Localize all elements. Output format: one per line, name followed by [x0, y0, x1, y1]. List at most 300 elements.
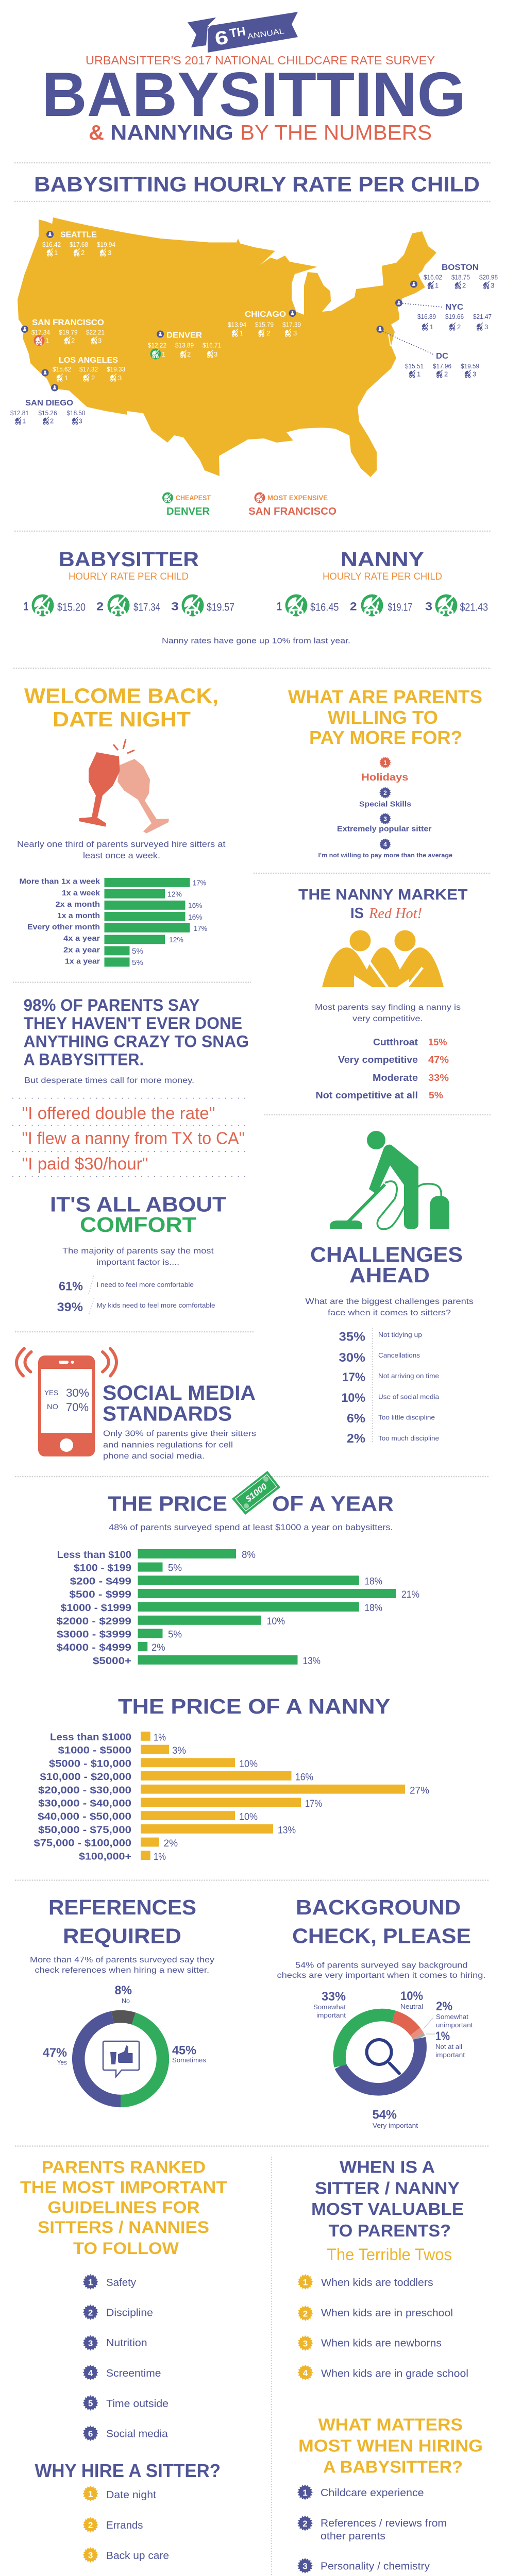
panel: social media standards: Only 30% of parents give their sitters	[103, 1430, 256, 1438]
city: Seattle: 1	[54, 249, 58, 257]
bar chart: frequency: 1x a month	[57, 911, 100, 920]
panel: what parents pay more for: 3	[383, 815, 387, 822]
city: Los Angeles: 2	[91, 374, 95, 382]
panel: background check: Neutral	[400, 2003, 423, 2010]
city: Los Angeles: $19.33	[107, 365, 125, 373]
city: San Diego: SAN DIEGO	[25, 399, 73, 408]
panel: references required: No	[122, 1997, 130, 2005]
panel: why hire a sitter: Back up care	[106, 2550, 169, 2562]
panel: nanny rates: 1	[277, 600, 282, 613]
panel: background check: important	[316, 2011, 346, 2019]
panel: when is a sitter most valuable: When kids are in preschool	[321, 2308, 453, 2319]
challenge list	[339, 1330, 440, 1446]
city: San Diego: $15.26	[38, 409, 57, 417]
bar chart: frequency: 17%	[193, 879, 206, 887]
bar chart: yearly babysitting spend: $4000 - $4999	[56, 1642, 131, 1653]
panel: nanny rates: $16.45	[310, 602, 339, 613]
city: Boston: BOSTON	[442, 263, 479, 272]
panel: why hire a sitter: 3	[88, 2550, 93, 2561]
city: NYC: $19.66	[445, 313, 464, 320]
panel: background check: 2%	[436, 1999, 452, 2013]
city: San Francisco: 3	[98, 337, 102, 344]
city: Denver: 3	[214, 350, 217, 358]
competitiveness table: Not competitive at all	[315, 1090, 418, 1100]
panel: 98% of parents: A BABYSITTER.	[24, 1050, 144, 1069]
city: San Francisco: $19.79	[59, 329, 77, 336]
panel: challenges ahead: face when it comes to sitters?	[328, 1309, 451, 1317]
panel: challenges ahead	[305, 1131, 474, 1446]
city: NYC: 1	[430, 323, 433, 331]
city: Los Angeles: 1	[64, 374, 68, 382]
bar chart: frequency: More than 1x a week	[20, 877, 100, 886]
bar chart: yearly babysitting spend: 10%	[267, 1616, 285, 1627]
panel: nanny rates	[277, 548, 488, 616]
bar chart: frequency	[20, 877, 207, 967]
city: Seattle: $17.68	[70, 241, 88, 248]
bar chart: yearly nanny spend: $75,000 - $100,000	[34, 1838, 131, 1849]
donut chart: background checks	[340, 2015, 420, 2089]
panel: background check: 33%	[322, 1990, 346, 2004]
bar chart: yearly nanny spend: $100,000+	[79, 1851, 131, 1862]
legend: cheapest and most expensive: DENVER	[166, 506, 210, 517]
panel: welcome back, date night	[17, 684, 226, 967]
bar chart: frequency: 1x a year	[65, 957, 100, 965]
panel: references required: REFERENCES	[48, 1895, 196, 1919]
panel: what matters most when hiring: References / reviews from	[321, 2518, 447, 2529]
city: Chicago: $15.79	[255, 321, 274, 329]
ribbon: 6th annual: TH	[229, 24, 247, 41]
panel: welcome back, date night: DATE NIGHT	[53, 707, 191, 731]
competitiveness table: Cutthroat	[373, 1037, 418, 1047]
panel: what matters most when hiring: A BABYSITTER?	[323, 2458, 463, 2476]
panel: parents ranked guidelines: SITTERS / NANNIES	[38, 2218, 209, 2236]
city: Chicago: $17.39	[282, 321, 301, 329]
panel: parents ranked guidelines: THE MOST IMPORTANT	[20, 2178, 228, 2197]
panel: why hire a sitter: WHY HIRE A SITTER?	[35, 2460, 221, 2481]
bar chart: yearly babysitting spend: 5%	[168, 1563, 182, 1574]
bar chart: yearly nanny spend: Less than $1000	[50, 1732, 131, 1743]
challenge list: 6%	[347, 1412, 365, 1426]
bar chart: yearly babysitting spend: 8%	[242, 1550, 256, 1561]
city: Los Angeles: LOS ANGELES	[59, 356, 118, 365]
city: Boston: 2	[462, 281, 466, 290]
panel: when is a sitter most valuable: SITTER / NANNY	[315, 2178, 460, 2198]
icon: wine glasses	[79, 739, 169, 834]
panel: what parents pay more for: WILLING TO	[328, 707, 438, 728]
city: DC	[376, 326, 479, 378]
bar chart: frequency: 12%	[169, 936, 183, 944]
panel: what parents pay more for: WHAT ARE PARENTS	[288, 686, 482, 707]
panel: what parents pay more for: 2	[383, 789, 387, 796]
panel: social media standards: and nannies regulations for cell	[103, 1440, 233, 1450]
bar chart: yearly babysitting spend: 5%	[168, 1629, 182, 1640]
city: San Francisco: SAN FRANCISCO	[32, 318, 104, 327]
city: San Francisco	[21, 318, 105, 346]
panel: comfort: 39%	[57, 1300, 83, 1314]
panel: references required	[30, 1895, 214, 2101]
challenge list: 35%	[339, 1330, 365, 1344]
panel: 98% of parents	[13, 996, 251, 1177]
panel: comfort: The majority of parents say the most	[62, 1247, 214, 1256]
competitiveness table: 33%	[428, 1073, 449, 1083]
icon: $1000 bill	[232, 1471, 280, 1515]
panel: references required: REQUIRED	[63, 1924, 181, 1947]
city: Chicago: 1	[240, 329, 243, 337]
header	[42, 12, 466, 144]
city: Seattle: SEATTLE	[60, 231, 97, 239]
city: Los Angeles: 3	[118, 374, 122, 382]
city: Boston: 1	[435, 281, 439, 290]
icon: $1000 bill: $1000	[243, 1481, 269, 1504]
panel: when is a sitter most valuable: 2	[303, 2309, 308, 2318]
map silhouette	[18, 217, 436, 477]
legend: cheapest and most expensive: MOST EXPENSIVE	[267, 494, 328, 502]
panel: what parents pay more for: Holidays	[361, 772, 409, 783]
panel: 98% of parents: But desperate times call for more money.	[24, 1076, 194, 1085]
panel: what parents pay more for: 4	[383, 841, 387, 848]
panel: what matters most when hiring	[297, 2415, 483, 2573]
bar chart: yearly nanny spend: 3%	[172, 1745, 186, 1756]
panel: nanny market: Red Hot!	[368, 905, 422, 922]
city: San Diego: $18.50	[67, 409, 86, 417]
bar chart: yearly babysitting spend: 18%	[365, 1603, 382, 1614]
bar chart: yearly nanny spend: $40,000 - $50,000	[38, 1811, 131, 1822]
icon: ringing phone: 30%	[66, 1386, 89, 1399]
city: Denver: 2	[187, 350, 191, 358]
bar chart: yearly nanny spend: 1%	[154, 1732, 166, 1743]
bar chart: yearly babysitting spend: Less than $100	[57, 1550, 131, 1561]
panel: when is a sitter most valuable: 1	[303, 2277, 308, 2287]
ranked list: 2	[88, 2308, 93, 2317]
panel: background check: CHECK, PLEASE	[292, 1924, 471, 1947]
panel: what matters most when hiring: Personality / chemistry	[321, 2561, 430, 2572]
panel: price of a year: 48% of parents surveyed spend at least $1000 a year on babysitters.	[109, 1522, 393, 1532]
panel: what parents pay more for: I'm not willing to pay more than the average	[318, 852, 452, 859]
icon: person vacuuming	[330, 1131, 449, 1229]
panel: what parents pay more for: Special Skills	[359, 800, 411, 808]
panel: why hire a sitter: Errands	[106, 2520, 143, 2531]
bar chart: yearly babysitting spend: $3000 - $3999	[57, 1629, 131, 1640]
bar chart: frequency: 4x a year	[63, 934, 100, 943]
ranked list: Screentime	[106, 2368, 161, 2379]
ranked list: 6	[88, 2429, 93, 2439]
city: DC: $15.51	[405, 362, 424, 370]
panel: background check: BACKGROUND	[296, 1895, 461, 1919]
panel: references required: check references when hiring a new sitter.	[35, 1966, 209, 1975]
challenge list: 10%	[341, 1391, 365, 1405]
city: San Francisco: $22.21	[86, 329, 105, 336]
ribbon: 6th annual	[188, 12, 298, 53]
panel: social media standards: STANDARDS	[103, 1403, 232, 1426]
panel: background check: 54%	[372, 2108, 397, 2122]
panel: nanny market	[298, 887, 468, 1100]
challenge list: 17%	[342, 1370, 365, 1384]
city: San Francisco: 2	[71, 337, 75, 344]
city: Boston: 3	[491, 281, 494, 290]
icon: ringing phone	[16, 1349, 116, 1456]
panel: nanny market: Most parents say finding a nanny is	[315, 1003, 461, 1012]
ranked list: 4	[88, 2368, 93, 2378]
panel: 98% of parents: 98% OF PARENTS SAY	[24, 996, 200, 1014]
city: Denver: 1	[162, 350, 165, 358]
ribbon: 6th annual: ANNUAL	[247, 27, 285, 41]
bar chart: yearly nanny spend: $50,000 - $75,000	[38, 1825, 131, 1836]
bar chart: yearly nanny spend: 13%	[278, 1825, 296, 1836]
panel: what matters most when hiring: 3	[302, 2562, 308, 2571]
nanny rates note: Nanny rates have gone up 10% from last year.	[162, 637, 350, 646]
bar chart: yearly nanny spend: $30,000 - $40,000	[38, 1798, 131, 1809]
panel: nanny rates: 3	[425, 600, 432, 613]
city: NYC: 2	[457, 323, 461, 331]
title second line: BY THE NUMBERS	[240, 121, 432, 144]
city: NYC: 3	[484, 323, 488, 331]
panel: why hire a sitter	[35, 2460, 221, 2563]
bar chart: frequency: 16%	[188, 902, 202, 910]
bar chart: frequency: 2x a year	[63, 945, 100, 954]
panel: nanny rates: $21.43	[460, 602, 488, 613]
title second line	[89, 121, 432, 144]
bar chart: yearly nanny spend: 10%	[239, 1759, 258, 1770]
ranked list: Social media	[106, 2429, 169, 2440]
bar chart: yearly nanny spend: 16%	[295, 1772, 313, 1783]
bar chart: frequency: 12%	[167, 890, 182, 899]
panel: background check: unimportant	[436, 2021, 473, 2029]
bar chart: yearly babysitting spend: $100 - $199	[74, 1563, 131, 1574]
panel: when is a sitter most valuable: When kids are newborns	[321, 2338, 442, 2349]
panel: what matters most when hiring: Childcare experience	[321, 2487, 424, 2499]
city: DC: DC	[436, 352, 448, 361]
panel: what parents pay more for: 1	[383, 759, 387, 767]
city: Seattle	[42, 231, 115, 257]
quotes	[13, 1104, 251, 1177]
city: Boston: $20.98	[479, 273, 498, 281]
panel: 98% of parents: ANYTHING CRAZY TO SNAG	[24, 1032, 249, 1050]
panel: references required: Yes	[57, 2059, 67, 2066]
city: Denver: $13.89	[175, 342, 194, 349]
panel: social media standards: phone and social media.	[103, 1452, 205, 1461]
legend: cheapest and most expensive: CHEAPEST	[176, 494, 211, 502]
panel: references required: Sometimes	[172, 2056, 206, 2064]
panel: social media standards	[16, 1349, 256, 1461]
bar chart: frequency: 16%	[188, 913, 202, 922]
bar chart: yearly nanny spend: $1000 - $5000	[58, 1745, 131, 1756]
panel: parents ranked guidelines: GUIDELINES FOR	[47, 2198, 200, 2217]
city: DC: 1	[417, 370, 420, 378]
city: Chicago: 3	[293, 329, 297, 337]
panel: parents ranked guidelines: TO FOLLOW	[73, 2239, 179, 2258]
panel: babysitter rates: $17.34	[133, 602, 160, 613]
city: San Francisco: $17.34	[31, 329, 50, 336]
bar chart: yearly babysitting spend: 13%	[303, 1656, 321, 1667]
city: Denver: $16.71	[203, 342, 221, 349]
heading: hourly rate: BABYSITTING HOURLY RATE PER CHILD	[34, 172, 480, 196]
competitiveness table: 5%	[429, 1090, 443, 1100]
competitiveness table: Moderate	[373, 1073, 418, 1083]
panel: references required: 47%	[43, 2046, 67, 2060]
bar chart: yearly nanny spend	[34, 1732, 429, 1862]
panel: background check: 54% of parents surveyed say background	[295, 1961, 468, 1970]
bar chart: yearly nanny spend: $20,000 - $30,000	[38, 1785, 131, 1796]
city: Boston: $16.02	[424, 273, 442, 281]
title second line: NANNYING	[110, 121, 233, 144]
panel: background check: 1%	[435, 2029, 450, 2043]
bar chart: yearly nanny spend: 17%	[305, 1799, 322, 1809]
city: San Diego: 2	[50, 417, 54, 425]
bar chart: yearly babysitting spend: $200 - $499	[70, 1576, 131, 1587]
panel: welcome back, date night: WELCOME BACK,	[24, 684, 218, 708]
city: NYC: NYC	[445, 303, 463, 312]
panel: what matters most when hiring: 1	[302, 2488, 308, 2498]
panel: when is a sitter most valuable: 4	[303, 2368, 308, 2378]
panel: social media standards: SOCIAL MEDIA	[103, 1382, 256, 1404]
ranked list: Discipline	[106, 2307, 153, 2318]
panel: when is a sitter most valuable: 3	[303, 2339, 308, 2348]
bar chart: yearly babysitting spend: $1000 - $1999	[61, 1603, 131, 1614]
city: NYC: $16.89	[417, 313, 436, 320]
city: Denver	[148, 331, 221, 360]
city: Chicago: CHICAGO	[245, 310, 286, 319]
leader: NYC	[403, 303, 442, 307]
panel: references required: More than 47% of parents surveyed say they	[30, 1956, 214, 1964]
quotes: "I paid $30/hour"	[22, 1154, 148, 1173]
challenge list: Not arriving on time	[378, 1372, 439, 1380]
bar chart: frequency: 17%	[194, 924, 207, 933]
ranked list: 5	[88, 2399, 93, 2408]
city: San Francisco: 1	[45, 337, 49, 344]
panel: when is a sitter most valuable: WHEN IS A	[340, 2157, 435, 2176]
panel: parents ranked guidelines	[20, 2158, 228, 2441]
panel: comfort: 61%	[59, 1280, 83, 1293]
bar chart: frequency: 2x a month	[56, 900, 100, 909]
panel: babysitter rates: HOURLY RATE PER CHILD	[69, 571, 189, 582]
panel: babysitter rates: $19.57	[207, 602, 234, 613]
panel: background check: Very important	[373, 2122, 418, 2129]
city: DC: 3	[473, 370, 476, 378]
panel: challenges ahead: AHEAD	[349, 1263, 430, 1287]
panel: babysitter rates: $15.20	[57, 602, 86, 613]
bar chart: yearly nanny spend: 1%	[154, 1852, 166, 1862]
city: DC: $19.59	[461, 362, 479, 370]
challenge list: 30%	[339, 1351, 365, 1365]
panel: nanny market: very competitive.	[352, 1014, 423, 1023]
panel: challenges ahead: CHALLENGES	[310, 1243, 463, 1266]
city: Seattle: 3	[108, 249, 111, 257]
panel: what matters most when hiring: other parents	[321, 2531, 385, 2542]
city: Seattle: 2	[81, 249, 85, 257]
icon: ringing phone: YES	[44, 1388, 58, 1397]
quotes: "I flew a nanny from TX to CA"	[22, 1129, 245, 1148]
panel: nanny rates: NANNY	[341, 548, 424, 571]
panel: when is a sitter most valuable: The Terrible Twos	[327, 2245, 452, 2264]
panel: comfort: My kids need to feel more comfortable	[97, 1301, 215, 1309]
panel: babysitter rates: BABYSITTER	[59, 548, 199, 571]
bar chart: yearly babysitting spend: 18%	[365, 1576, 382, 1587]
panel: comfort	[50, 1192, 226, 1315]
panel: when is a sitter most valuable	[298, 2157, 468, 2380]
bar chart: frequency: 5%	[132, 947, 143, 956]
panel: references required: 8%	[114, 1984, 132, 1997]
bar chart: frequency: 5%	[132, 958, 143, 967]
bar chart: yearly nanny spend: 27%	[410, 1785, 429, 1796]
bar chart: yearly babysitting spend: 2%	[152, 1642, 165, 1653]
panel: background check: checks are very important when it comes to hiring.	[277, 1971, 485, 1980]
city: Los Angeles	[41, 356, 125, 382]
challenge list: Too little discipline	[378, 1414, 435, 1421]
panel: when is a sitter most valuable: When kids are in grade school	[321, 2368, 468, 2380]
panel: babysitter rates: 1	[24, 600, 28, 613]
legend: cheapest and most expensive	[162, 493, 336, 517]
icon: nannies	[322, 930, 444, 987]
city: Chicago	[228, 310, 301, 337]
bar chart: frequency: Every other month	[27, 923, 100, 931]
city: San Diego: 1	[22, 417, 26, 425]
ranked list	[83, 2274, 169, 2441]
bar chart: yearly nanny spend: $10,000 - $20,000	[40, 1772, 131, 1783]
panel: nanny rates: 2	[350, 600, 357, 613]
US map with city rates	[10, 217, 498, 477]
city: NYC: $21.47	[473, 313, 492, 320]
city: San Diego: 3	[78, 417, 82, 425]
panel: comfort: I need to feel more comfortable	[97, 1281, 194, 1289]
panel: background check: Somewhat	[313, 2003, 346, 2011]
city: Denver: DENVER	[166, 331, 202, 340]
panel: what parents pay more for	[288, 686, 482, 859]
ranked list: Nutrition	[106, 2337, 147, 2349]
icon: thumbs up bubble	[103, 2041, 139, 2077]
bar chart: yearly babysitting spend: $5000+	[93, 1656, 131, 1667]
city: Los Angeles: $17.32	[79, 365, 98, 373]
city: Denver: $12.22	[148, 342, 166, 349]
leader: DC	[383, 332, 433, 354]
panel: price of a nanny: THE PRICE OF A NANNY	[118, 1694, 391, 1718]
panel: why hire a sitter: Date night	[106, 2489, 156, 2501]
panel: nanny market: IS	[350, 905, 364, 922]
challenge list: Not tidying up	[378, 1331, 422, 1338]
legend: cheapest and most expensive: SAN FRANCISCO	[248, 506, 336, 517]
ribbon: 6th annual: 6	[213, 26, 230, 49]
bar chart: yearly nanny spend: $5000 - $10,000	[49, 1758, 131, 1769]
title second line: &	[89, 121, 104, 144]
competitiveness table: 15%	[428, 1037, 447, 1047]
city: DC: $17.96	[433, 362, 451, 370]
panel: when is a sitter most valuable: MOST VALUABLE	[311, 2199, 464, 2218]
challenge list: Use of social media	[378, 1393, 440, 1401]
panel: 98% of parents: THEY HAVEN'T EVER DONE	[24, 1014, 242, 1032]
city: Boston: $18.75	[451, 273, 470, 281]
panel: why hire a sitter: 1	[88, 2489, 93, 2499]
bar chart: frequency: 1x a week	[62, 889, 100, 897]
panel: background check: important	[435, 2051, 465, 2059]
city: Seattle: $16.42	[42, 241, 61, 248]
city: Boston	[410, 263, 498, 290]
city: NYC	[395, 299, 492, 331]
ranked list: 3	[88, 2338, 93, 2348]
city: DC: 2	[444, 370, 448, 378]
quotes: "I offered double the rate"	[22, 1104, 215, 1123]
panel: what matters most when hiring: WHAT MATTERS	[318, 2415, 463, 2434]
panel: babysitter rates: 2	[96, 600, 104, 613]
city: San Diego: $12.81	[10, 409, 29, 417]
panel: nanny rates: $19.17	[388, 602, 412, 613]
panel: nanny rates: HOURLY RATE PER CHILD	[323, 571, 442, 582]
city: Chicago: $13.94	[228, 321, 246, 329]
panel: background check: Somewhat	[436, 2013, 468, 2021]
competitiveness table: 47%	[428, 1055, 449, 1065]
ranked list: Safety	[106, 2277, 136, 2289]
panel: background check: 10%	[400, 1989, 423, 2003]
panel: background check: Not at all	[435, 2043, 462, 2050]
panel: references required: 45%	[172, 2044, 196, 2058]
